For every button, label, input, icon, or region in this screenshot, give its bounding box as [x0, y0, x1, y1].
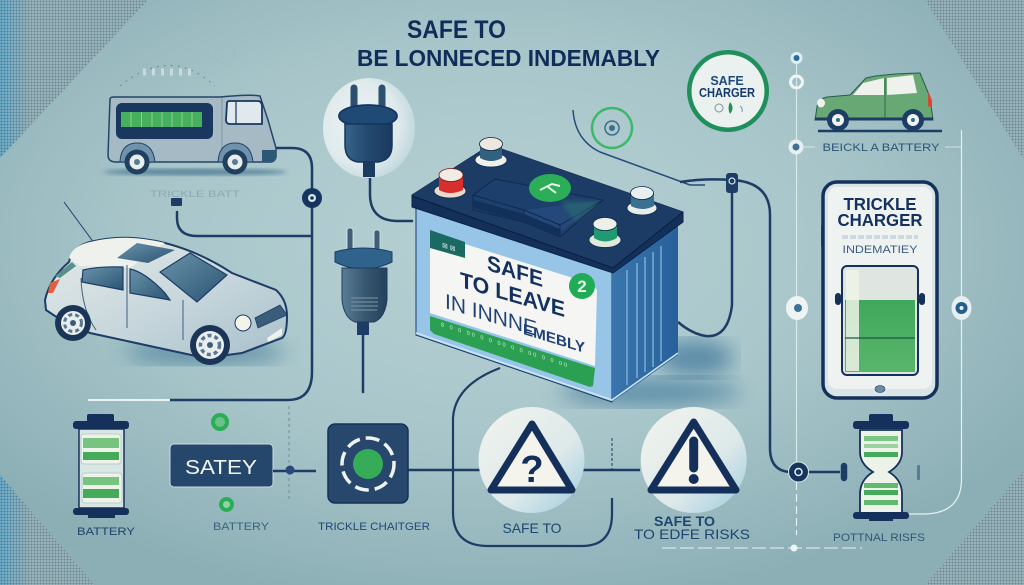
- label text: EMEBLY: [523, 321, 585, 357]
- car: [45, 202, 287, 365]
- safe charger badge: [687, 50, 769, 132]
- battery: 8 0 0 00 0 0 00 0 0 00 0 0 00: [441, 322, 569, 370]
- green dots: [211, 413, 234, 512]
- phone: [821, 182, 937, 398]
- wiring right: [678, 179, 846, 480]
- plug 2: [335, 228, 392, 335]
- label text: [445, 250, 585, 357]
- trickle charger caption: TRICKLE CHAITGER: [318, 521, 430, 533]
- wire connector top right: [726, 173, 738, 193]
- label badge: [569, 273, 595, 299]
- label text: TO LEAVE: [460, 267, 565, 322]
- wiring left: [170, 148, 412, 400]
- phone heading: CHARGER: [838, 210, 923, 230]
- green car caption: BEICKL A BATTERY: [822, 142, 940, 154]
- bottom left battery icon: [73, 414, 129, 518]
- risks caption: [634, 513, 750, 542]
- terminal red: [434, 168, 466, 198]
- terminal right: [627, 186, 657, 215]
- battery label: [430, 233, 597, 366]
- safe to caption: SAFE TO: [502, 520, 562, 536]
- battery: ⊠ ⊠: [442, 241, 456, 253]
- wire node right: [788, 462, 808, 482]
- warning question: ?: [520, 449, 544, 491]
- label text: SAFE: [487, 250, 543, 292]
- phone heading: TRICKLE: [844, 194, 916, 214]
- safety button: [170, 444, 273, 487]
- battery ribs: [627, 246, 661, 385]
- safe charger badge: SAFE: [710, 74, 744, 88]
- faded line under car: [88, 399, 170, 401]
- warning exclamation: [641, 407, 747, 513]
- potential risks caption: POTTNAL RISFS: [833, 532, 925, 544]
- branch connector: [171, 198, 182, 206]
- title: [357, 16, 660, 71]
- phone heading: [838, 194, 923, 230]
- battery caption 2: BATTERY: [213, 521, 270, 533]
- panel behind green ring: [573, 110, 705, 185]
- phone battery: [835, 266, 925, 375]
- label tab: [430, 230, 465, 258]
- battery lid: [412, 145, 683, 273]
- label text: IN INNNE: [445, 289, 537, 341]
- title: SAFE TO: [407, 16, 506, 44]
- wire node left: [302, 188, 322, 208]
- van: [103, 95, 287, 176]
- guide nodes: [786, 52, 972, 552]
- battery caption: BATTERY: [77, 526, 136, 538]
- plug 1: [323, 78, 415, 178]
- safety ring icon: [592, 108, 632, 148]
- battery body front: [416, 207, 612, 402]
- phone subtext: INDEMATIEY: [842, 244, 918, 256]
- wiring battery to bottom frame: [408, 368, 640, 546]
- van decoration: [120, 44, 235, 86]
- warning question: [478, 407, 584, 513]
- white guide lines: [662, 62, 962, 548]
- battery: [412, 138, 683, 402]
- terminal green: [589, 218, 621, 248]
- safe charger badge: CHARGER: [699, 86, 755, 100]
- title: BE LONNECED INDEMABLY: [357, 45, 660, 71]
- terminal back left: [475, 138, 507, 167]
- label green strip: [430, 316, 595, 387]
- van caption: TRICKLE BATT: [150, 189, 240, 200]
- risks caption: SAFE TO: [654, 513, 715, 529]
- hourglass: [853, 414, 920, 521]
- trickle charger button: [328, 424, 408, 503]
- green car: [815, 73, 942, 131]
- connector: [273, 466, 316, 474]
- risks caption: TO EDFE RISKS: [634, 526, 750, 542]
- label badge: 2: [577, 277, 587, 296]
- dashed divider: [288, 406, 290, 500]
- shadows: [125, 340, 740, 406]
- battery body side: [612, 226, 678, 402]
- safety button: SATEY: [185, 457, 257, 479]
